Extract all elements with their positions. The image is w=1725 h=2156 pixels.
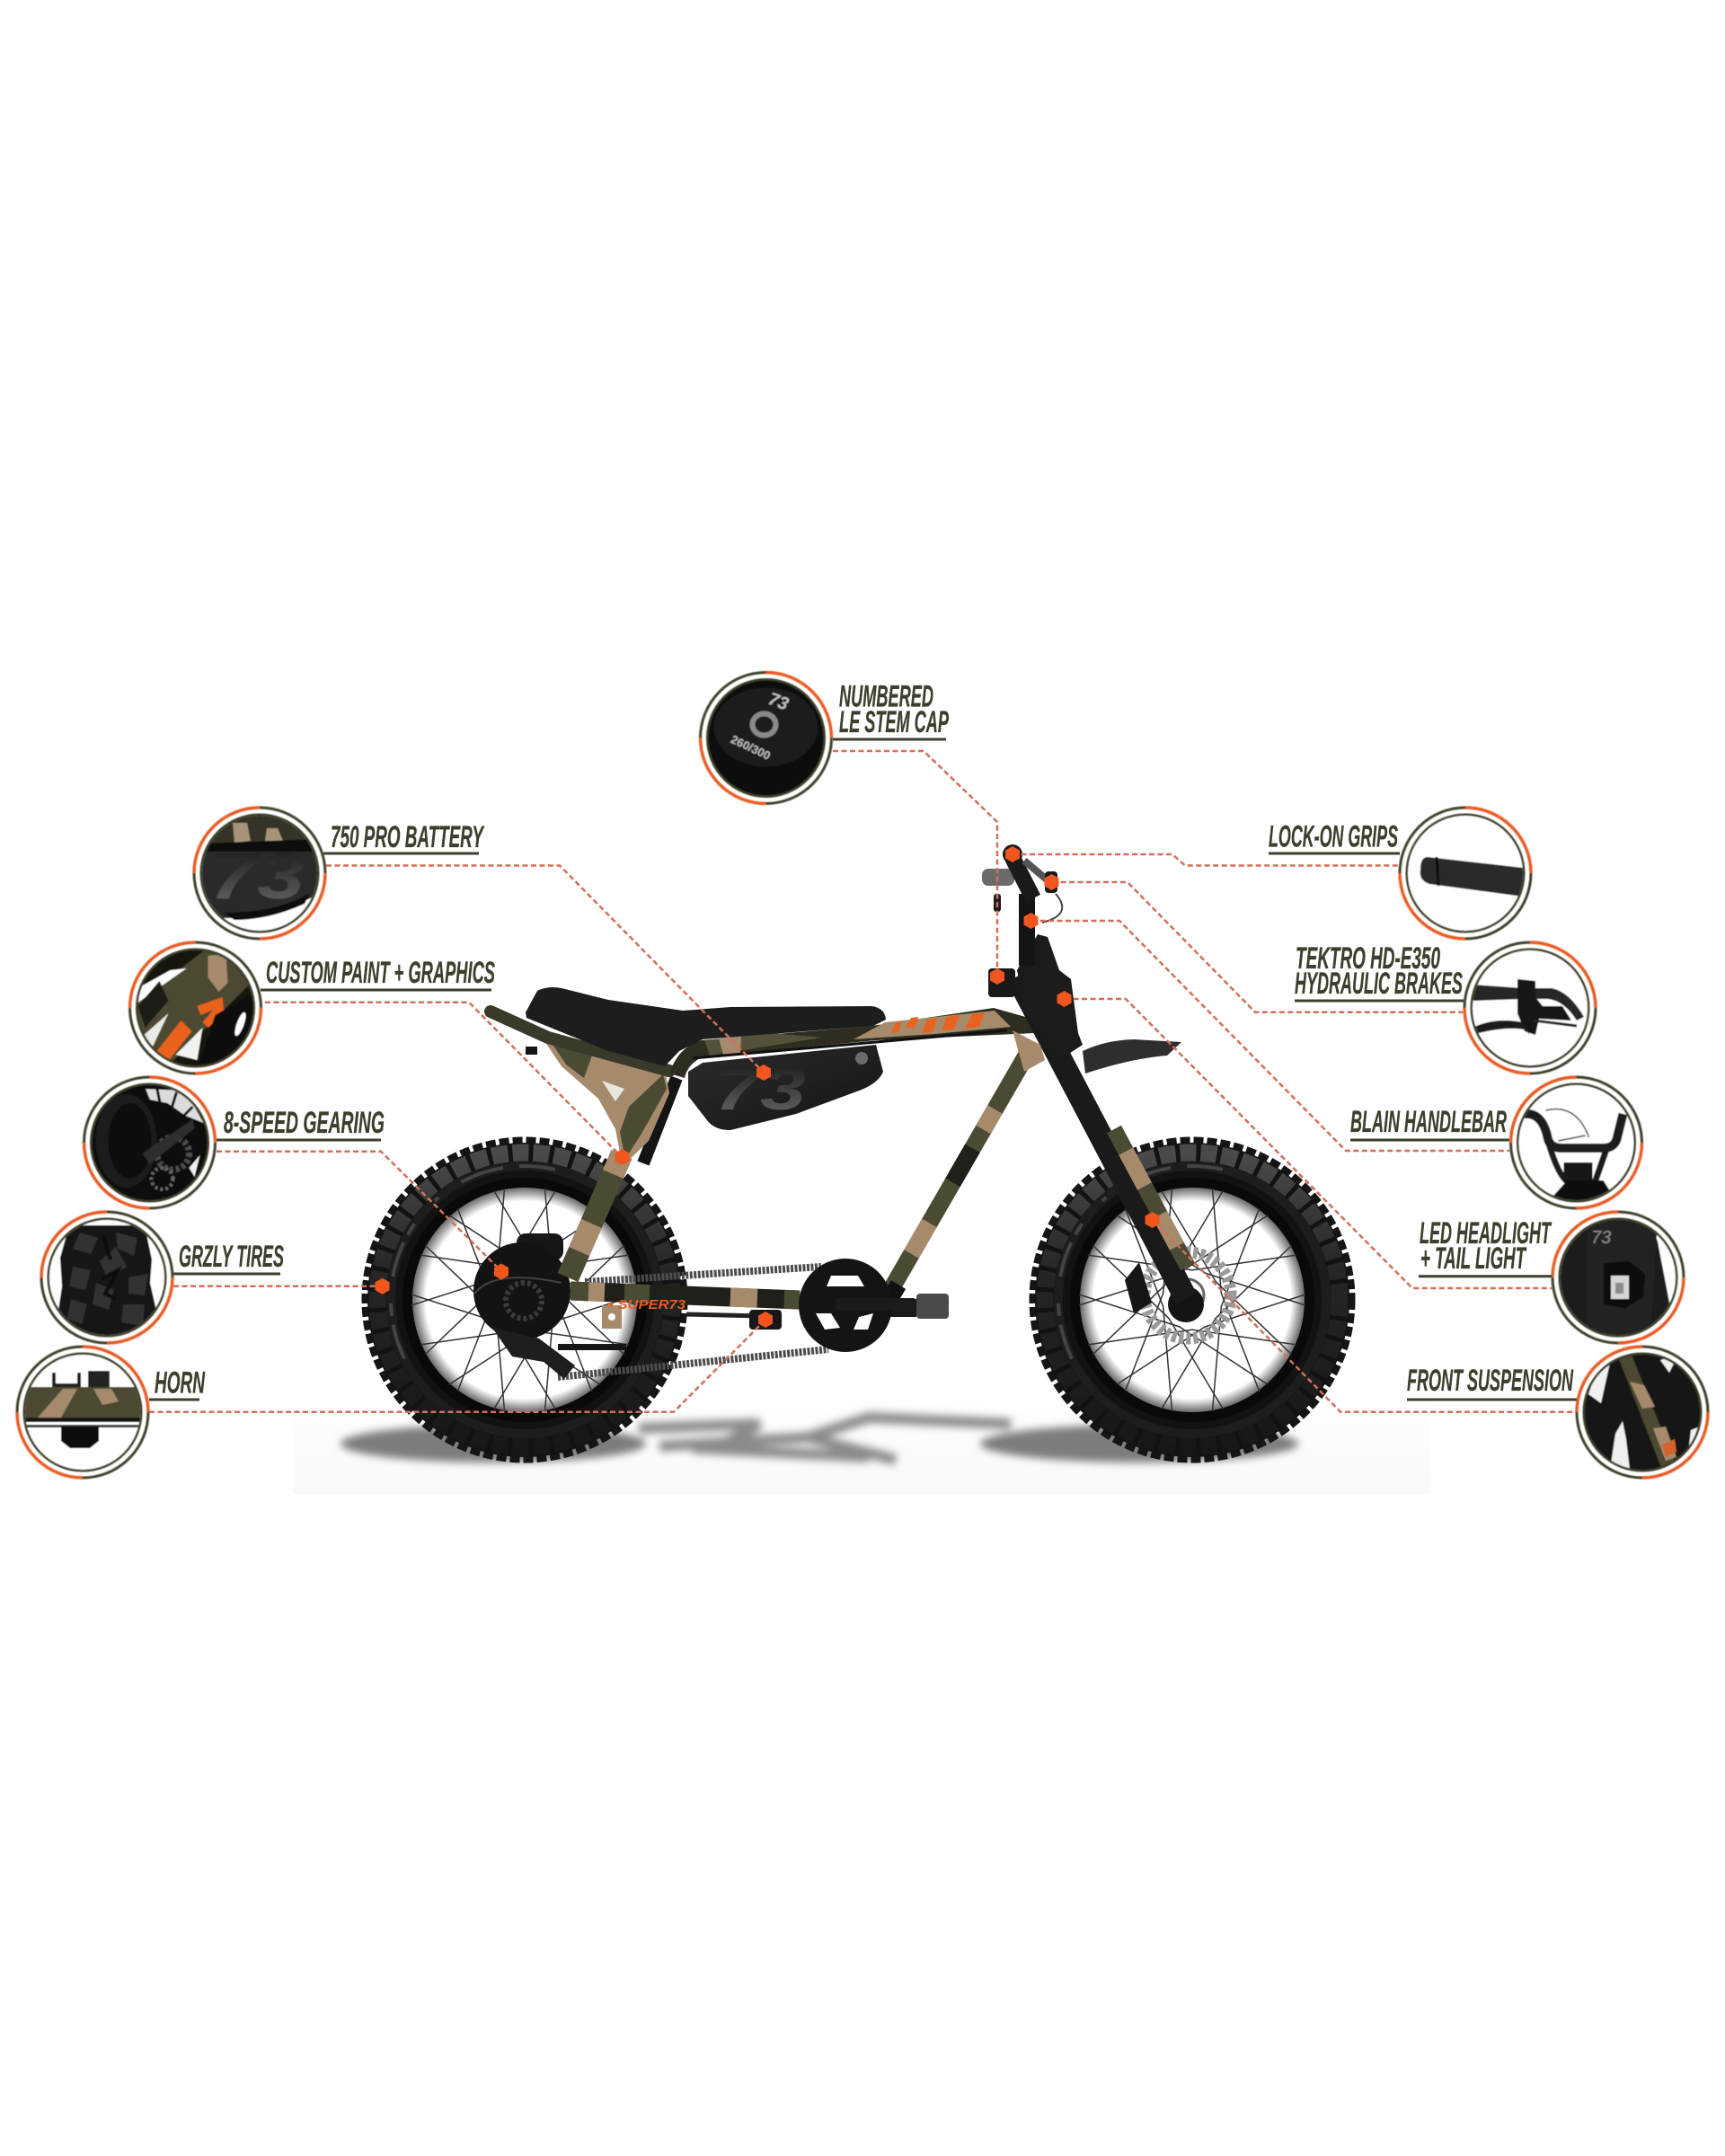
fork [1013,976,1188,1298]
callout: numbered LE stem cap [701,672,949,803]
rear wheel [365,1140,685,1460]
callout: LED headlight and tail light [1419,1212,1684,1343]
thumbnail: stem cap [701,672,832,803]
battery [688,1045,883,1130]
label: custom paint and graphics: CUSTOM PAINT + GRAPHICS [266,956,495,990]
callout: grzly tires [41,1212,284,1343]
rear subframe tube and plate [491,1012,669,1166]
callout: horn [17,1347,206,1478]
label: 8-speed gearing: 8-SPEED GEARING [224,1106,385,1140]
thumbnail: custom paint [129,942,261,1074]
callout: tektro brakes [1295,941,1596,1074]
label: tektro HD-E350 hydraulic brakes: HYDRAULIC BRAKES [1295,967,1463,1001]
chain [558,1267,828,1377]
label: numbered LE stem cap: LE STEM CAP [839,705,949,739]
leader line: stem cap [833,751,997,976]
label: grzly tires: GRZLY TIRES [179,1240,284,1274]
callout: 8-speed gearing [84,1077,385,1208]
label: tektro HD-E350 hydraulic brakes: TEKTRO HD-E350 [1296,941,1440,976]
thumbnail: horn [17,1347,148,1478]
front fender [1083,1039,1181,1074]
rear hub and derailleur [473,1233,626,1379]
thumbnail: battery [194,808,325,939]
leader line: grips [1013,854,1398,866]
leader line: battery [326,866,764,1073]
horn [749,1310,782,1330]
top tube with checker graphics [669,1008,1035,1078]
label: LED headlight + tail light: + TAIL LIGHT [1420,1241,1527,1276]
thumbnail: brakes [1464,942,1596,1074]
callout: 750 pro battery [194,808,485,939]
leader line: headlight [1065,999,1552,1288]
thumbnail: stem cap: 260/300 [729,732,773,763]
thumbnail: grips [1400,808,1531,939]
marker dots [376,846,1159,1328]
label: front suspension: FRONT SUSPENSION [1407,1364,1574,1398]
callout: front suspension [1407,1347,1708,1478]
label: blain handlebar: BLAIN HANDLEBAR [1350,1105,1507,1139]
stem and handlebar [982,844,1062,997]
leader line: custom paint [265,1003,622,1157]
bike illustration [365,844,1352,1460]
label: LED headlight + tail light: LED HEADLIGHT [1420,1216,1552,1250]
thumbnail: headlight [1552,1212,1684,1343]
battery: 73 [714,1056,806,1122]
seat [526,987,886,1066]
seat stay, chain stay and down tube (camo frame) [568,1051,1029,1316]
thumbnail: headlight: 73 [1591,1228,1611,1248]
leader line: 8-speed gearing [217,1152,501,1271]
callout: lock-on grips [1269,808,1531,939]
leader line: handlebar [1031,921,1509,1151]
thumbnail: battery: 73 [209,841,305,913]
label: horn: HORN [155,1365,206,1400]
chainring and crank [799,1259,949,1352]
callout: blain handlebar [1350,1077,1642,1208]
leader line: horn [149,1320,765,1412]
thumbnail: tires [41,1212,172,1343]
number plate [1017,934,1083,1060]
leader line: suspension [1153,1220,1576,1412]
leader lines and feature markers [149,751,1576,1412]
thumbnail: stem cap: 73 [765,689,792,714]
leader line: grzly tires [173,1285,382,1287]
label: lock-on grips: LOCK-ON GRIPS [1269,819,1398,853]
ground plane and shadows [293,1383,1430,1494]
infographic: bike feature diagram [14,670,1711,1480]
front wheel [1032,1140,1352,1460]
callout: custom paint and graphics [129,942,495,1074]
thumbnail: handlebar [1511,1077,1642,1208]
thumbnail: gearing [84,1077,216,1208]
thumbnail: suspension [1577,1347,1708,1478]
label: numbered LE stem cap: NUMBERED [839,679,933,713]
label: 750 pro battery: 750 PRO BATTERY [331,820,485,854]
leader line: brakes [1052,882,1463,1012]
SUPER73 frame lettering: • SUPER73 [608,1297,686,1312]
